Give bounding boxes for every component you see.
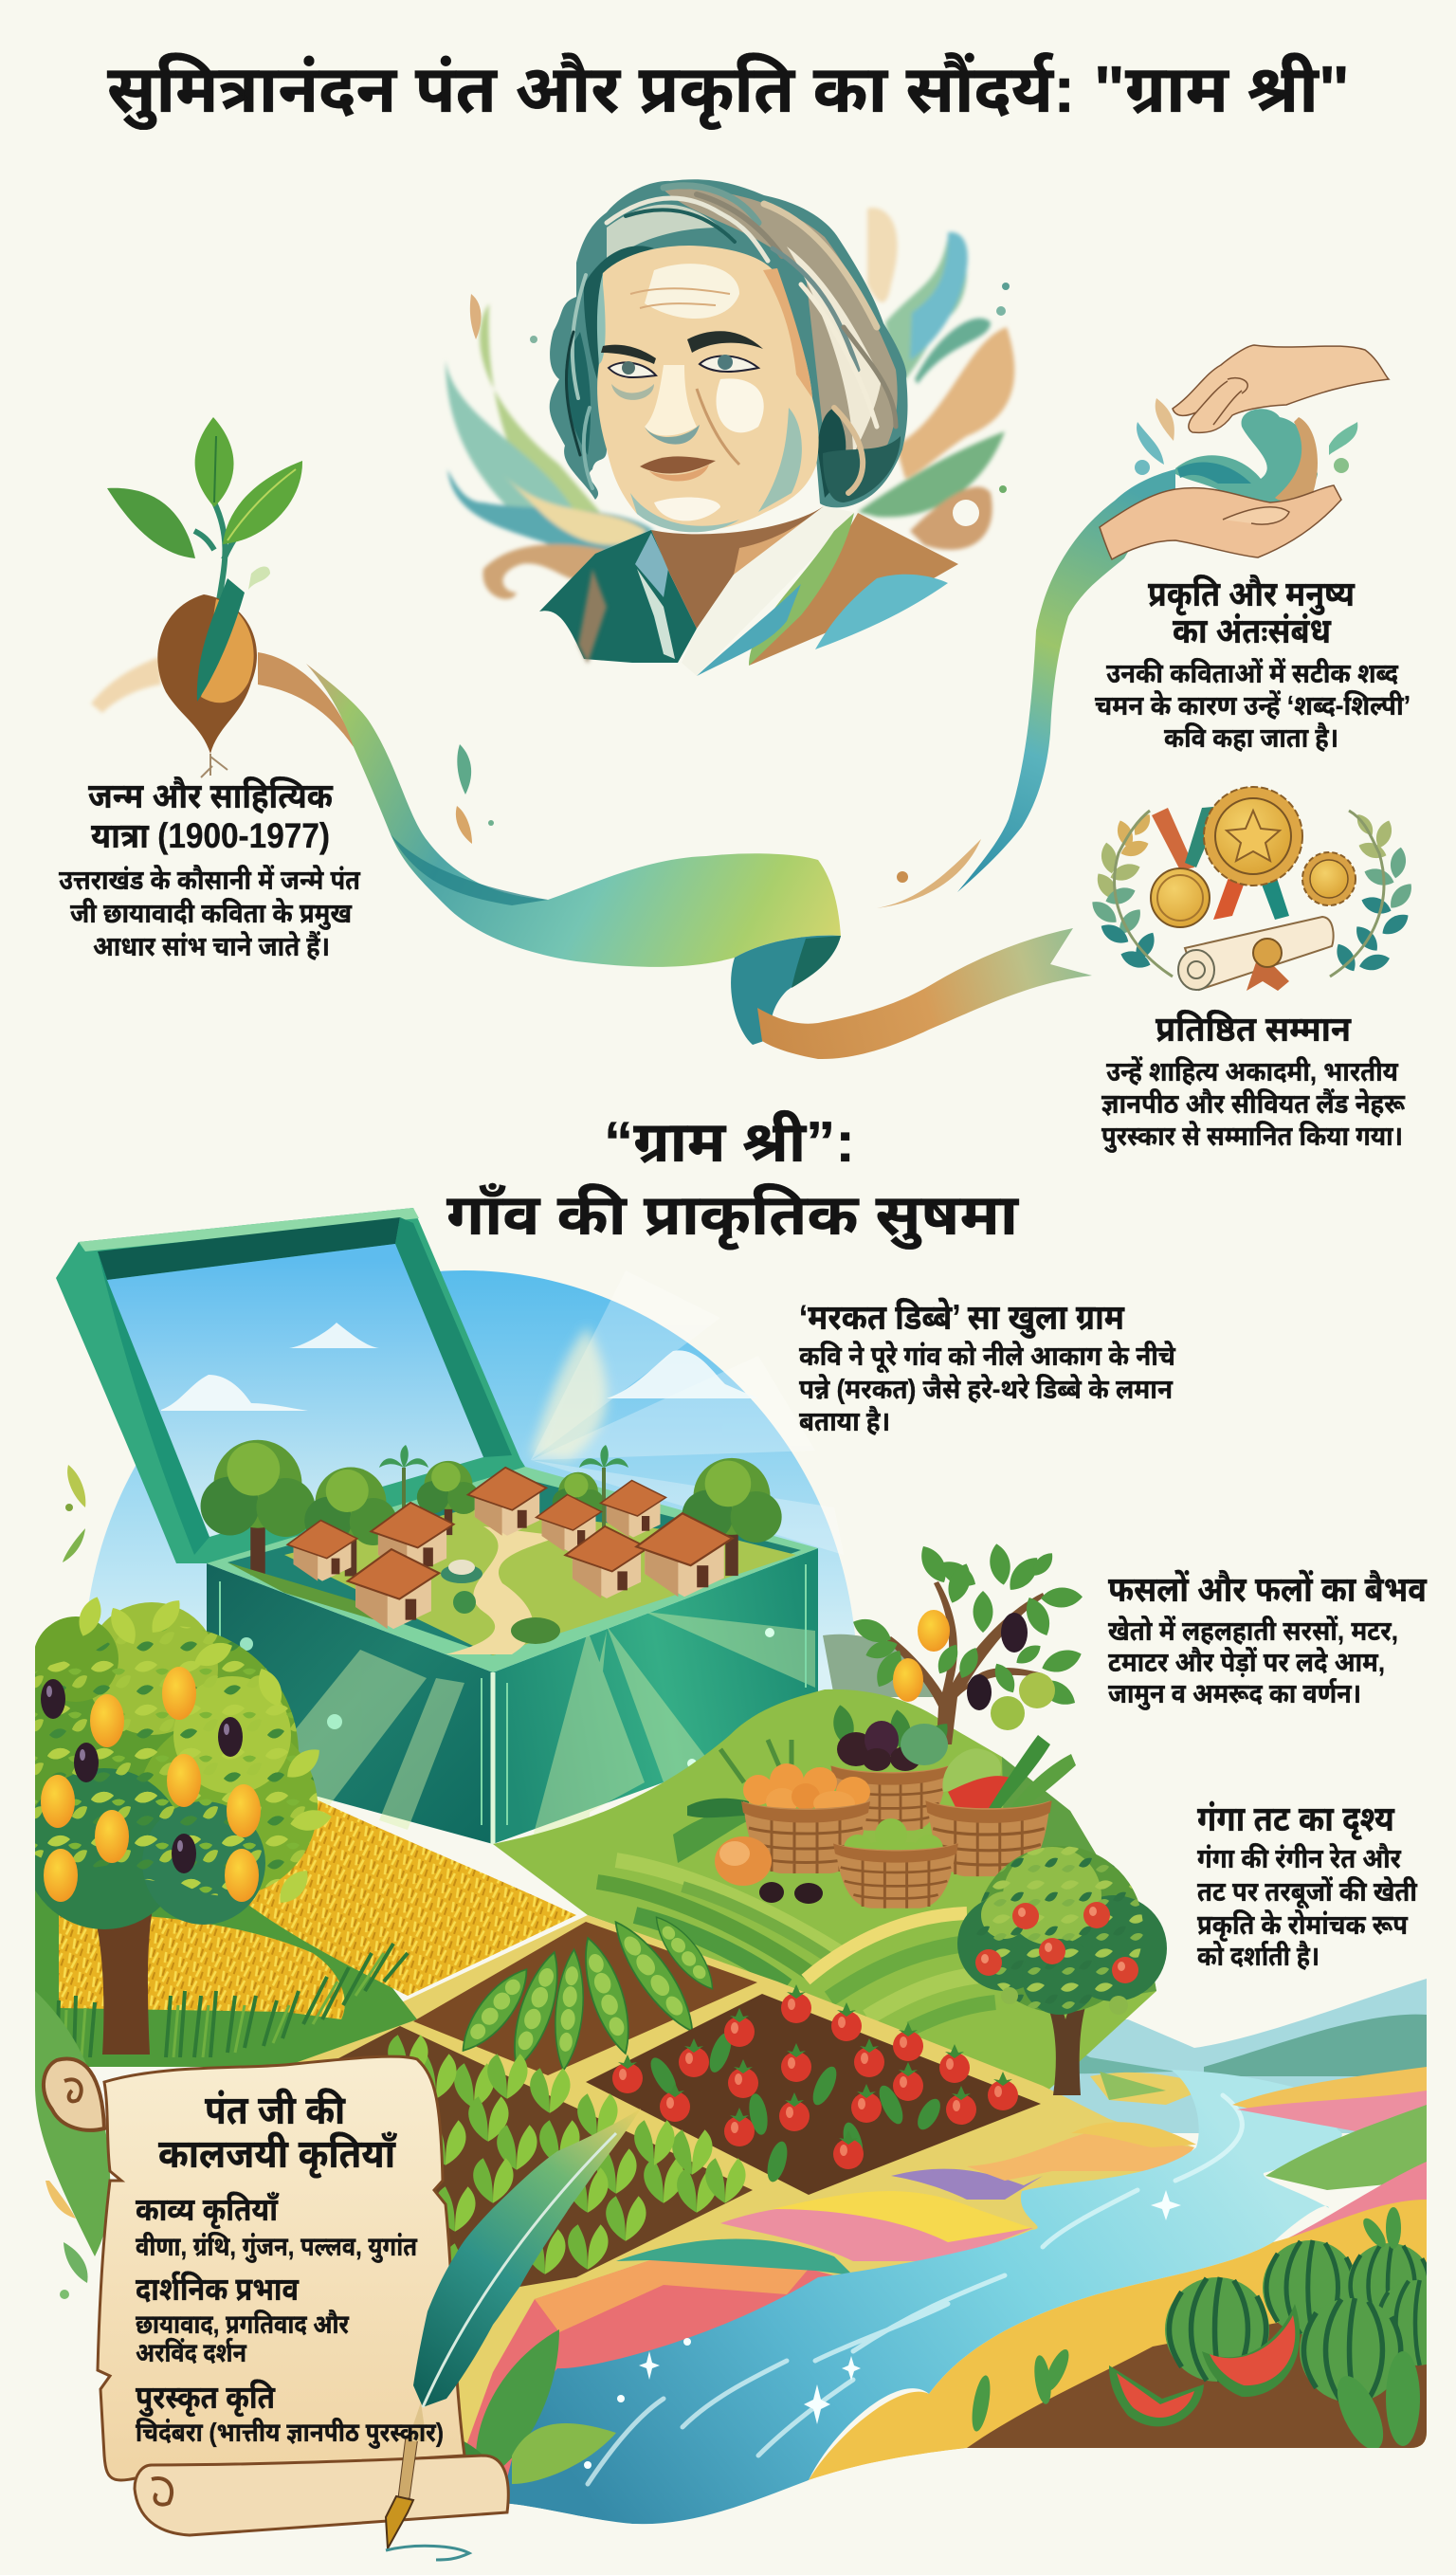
- jacket left: [539, 530, 697, 663]
- panel: parchment scroll of timeless works: [44, 2056, 508, 2535]
- green hills behind baskets: [493, 1634, 1156, 2095]
- text block: prestigious honours: पुरस्कार से सम्मानित किया गया।: [1101, 1120, 1403, 1153]
- text block: nature and human relationship: कवि कहा जाता है।: [1164, 722, 1338, 754]
- text block: nature and human relationship: [1095, 575, 1410, 754]
- text block: Ganga bank scene: तट पर तरबूजों की खेती: [1197, 1875, 1417, 1908]
- text block: emerald box village: [799, 1297, 1176, 1437]
- small leaves beside the lid: [63, 1465, 85, 1562]
- shirt: [682, 506, 858, 676]
- baskets of fruit and vegetables: [673, 1704, 1076, 1908]
- leafy vegetable plot: [322, 2026, 753, 2299]
- title: सुमित्रानंदन पंत और प्रकृति का सौंदर्य: "ग्राम श्री": [107, 52, 1350, 131]
- text block: birth and literary journey: जन्म और साहित्यिक: [88, 776, 334, 815]
- illustration: sky dome behind emerald box: [83, 1270, 858, 1707]
- icon: fruit tree: [849, 1542, 1084, 1744]
- scroll entry: poetry works: [136, 2191, 418, 2263]
- scroll entry: poetry works: काव्य कृतियाँ: [136, 2191, 280, 2230]
- text block: emerald box village: कवि ने पूरे गांव को नीले आकाग के नीचे: [799, 1340, 1176, 1373]
- text block: nature and human relationship: उनकी कविताओं में सटीक शब्द: [1106, 658, 1399, 689]
- scroll heading: पंत जी की: [205, 2088, 346, 2132]
- text block: crops and fruits: टमाटर और पेड़ों पर लदे आम,: [1108, 1646, 1385, 1678]
- wheat field: [35, 1792, 576, 2067]
- emerald box with village inside: [201, 1440, 818, 1844]
- scroll entry: philosophical influence: दार्शनिक प्रभाव: [136, 2271, 300, 2308]
- tomato plot: [586, 1984, 1041, 2195]
- text block: nature and human relationship: का अंतःसंबंध: [1173, 612, 1332, 650]
- text block: prestigious honours: [1101, 1010, 1406, 1153]
- icon: hands holding swirl of nature: [1100, 345, 1389, 559]
- text block: Ganga bank scene: प्रकृति के रोमांचक रूप: [1197, 1908, 1409, 1942]
- text block: prestigious honours: प्रतिष्ठित सम्मान: [1156, 1010, 1352, 1049]
- emerald box lid with sky painting: [56, 1208, 533, 1563]
- ribbon connecting the timeline: [91, 469, 1175, 1059]
- icon: feather quill pen: [386, 2109, 641, 2560]
- section heading: “ग्राम श्री”:: [604, 1110, 855, 1174]
- hair back: [550, 179, 907, 507]
- text block: birth and literary journey: [59, 776, 361, 962]
- icon: medals, wreath and certificate: [1087, 787, 1417, 991]
- scroll entry: poetry works: वीणा, ग्रंथि, गुंजन, पल्लव, युगांत: [136, 2231, 418, 2263]
- text block: nature and human relationship: चमन के कारण उन्हें ‘शब्द-शिल्पी’: [1095, 689, 1410, 721]
- scroll text: timeless works: [136, 2088, 444, 2449]
- text block: birth and literary journey: जी छायावादी कविता के प्रमुख: [70, 897, 353, 930]
- yellow earth between plots: [284, 1915, 1194, 2484]
- kurta collar blue: [635, 533, 668, 597]
- mouth: [640, 456, 716, 474]
- text block: birth and literary journey: उत्तराखंड के कौसानी में जन्मे पंत: [59, 864, 361, 896]
- colourful river sand banks: [466, 2072, 1196, 2476]
- face: [597, 246, 819, 532]
- distant mountains: [1049, 1979, 1427, 2133]
- icon: sprouting seed: [107, 417, 302, 777]
- scroll heading: [158, 2088, 398, 2179]
- scroll entry: awarded work: [136, 2380, 444, 2449]
- small leaves left of scroll: [46, 2181, 88, 2299]
- neck: [651, 506, 824, 629]
- section heading: [446, 1110, 1019, 1251]
- text block: crops and fruits: जामुन व अमरूद का वर्णन।: [1108, 1678, 1361, 1710]
- illustration: farmland landscape: [35, 1634, 1456, 2524]
- section heading: गाँव की प्राकृतिक सुषमा: [446, 1183, 1019, 1251]
- scroll entry: awarded work: पुरस्कृत कृति: [136, 2380, 276, 2418]
- scroll heading: कालजयी कृतियाँ: [158, 2131, 398, 2179]
- leaves scattered: [457, 744, 471, 794]
- nose: [645, 365, 697, 435]
- text block: emerald box village: ‘मरकत डिब्बे’ सा खुला ग्राम: [799, 1297, 1125, 1339]
- text block: Ganga bank scene: गंगा तट का दृश्य: [1197, 1799, 1395, 1840]
- river: [502, 2070, 1342, 2524]
- pea plot: [413, 1909, 757, 2075]
- icon: mango tree: [35, 1597, 332, 2055]
- icon: tomato tree: [957, 1846, 1167, 2095]
- right river banks: [1232, 2067, 1427, 2242]
- terraced fields: [597, 1860, 995, 2029]
- eyes: [609, 362, 656, 377]
- text block: prestigious honours: उन्हें शाहित्य अकादमी, भारतीय: [1106, 1056, 1399, 1087]
- text block: emerald box village: बताया है।: [799, 1406, 890, 1437]
- text block: emerald box village: पन्ने (मरकत) जैसे हरे-थरे डिब्बे के लमान: [799, 1373, 1174, 1405]
- green leaf behind scroll: [35, 1991, 110, 2256]
- eyebrows: [601, 345, 656, 364]
- text block: birth and literary journey: आधार सांभ चाने जाते हैं।: [93, 930, 330, 962]
- right jacket: [749, 513, 958, 666]
- yellow bank with watermelons: [809, 2200, 1456, 2480]
- text block: Ganga bank scene: गंगा की रंगीन रेत और: [1197, 1842, 1402, 1874]
- text block: birth and literary journey: यात्रा (1900-1977): [91, 816, 330, 855]
- text block: Ganga bank scene: [1197, 1799, 1417, 1972]
- text block: crops and fruits: [1108, 1569, 1428, 1710]
- text block: nature and human relationship: प्रकृति और मनुष्य: [1148, 575, 1356, 615]
- portrait of the poet with watercolour swirls: [446, 179, 1014, 676]
- scroll entry: philosophical influence: छायावाद, प्रगतिवाद और: [136, 2309, 350, 2339]
- scroll entry: philosophical influence: [136, 2271, 350, 2367]
- large leaves near quill: [464, 2329, 616, 2484]
- text block: Ganga bank scene: को दर्शाती है।: [1197, 1941, 1320, 1972]
- text block: crops and fruits: खेतो में लहलहाती सरसों, मटर,: [1108, 1615, 1398, 1647]
- text block: prestigious honours: ज्ञानपीठ और सीवियत लैंड नेहरू: [1101, 1087, 1406, 1120]
- scroll entry: philosophical influence: अरविंद दर्शन: [136, 2337, 247, 2367]
- scroll entry: awarded work: चिदंबरा (भात्तीय ज्ञानपीठ पुरस्कार): [136, 2417, 444, 2449]
